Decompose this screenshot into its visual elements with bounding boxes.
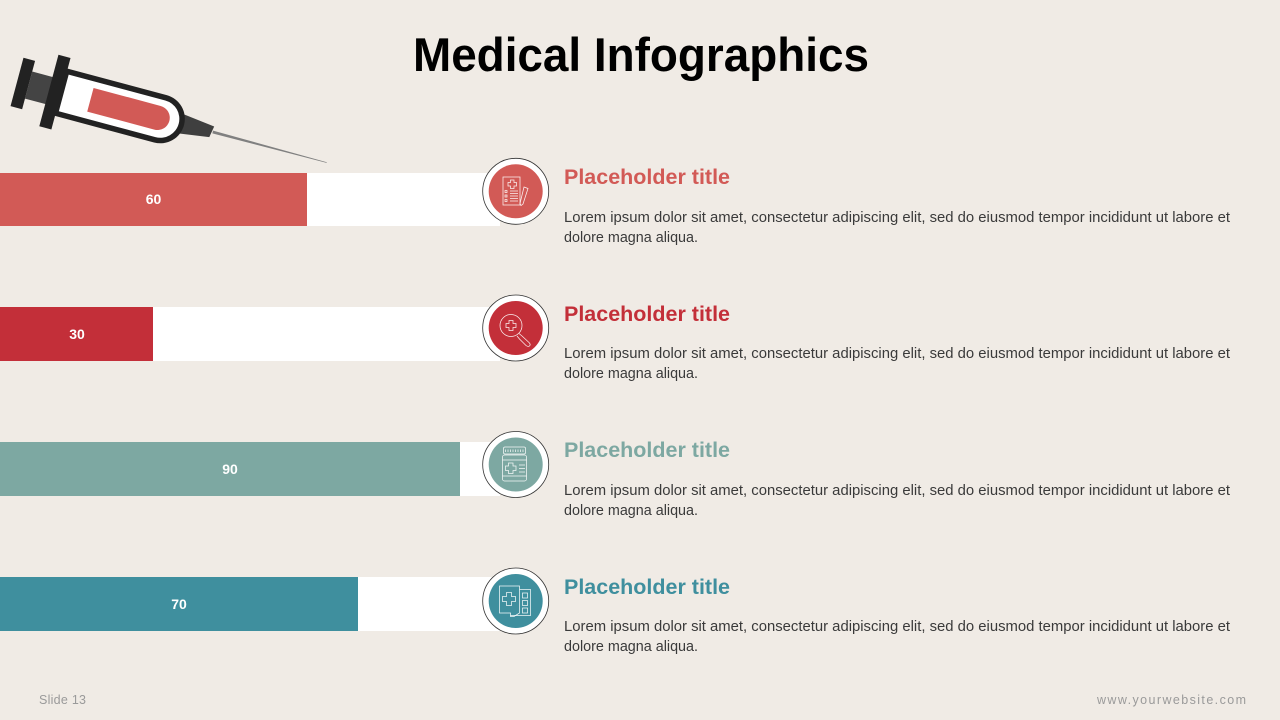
text block 2 [564, 303, 1231, 382]
bar row 4: track and value 70: 70 [171, 596, 187, 612]
text block 4: Placeholder title [564, 576, 730, 599]
text block 1 [564, 166, 1231, 246]
bar row 1: track and value 60: 60 [146, 191, 161, 207]
text block 1: Placeholder title [564, 166, 730, 189]
text block 1: dolore magna aliqua. [564, 229, 698, 246]
text block 2: Placeholder title [564, 303, 730, 326]
icon: magnifier badge [483, 295, 549, 361]
text block 2: dolore magna aliqua. [564, 365, 698, 382]
bar row 4: track and value 70 [0, 577, 500, 631]
bar row 3: track and value 90: 90 [222, 461, 238, 477]
text block 1: Lorem ipsum dolor sit amet, consectetur adipiscing elit, sed do eiusmod tempor incididunt ut labore et [564, 209, 1231, 226]
footer: website: www.yourwebsite.com [1096, 693, 1246, 707]
text block 2: Lorem ipsum dolor sit amet, consectetur adipiscing elit, sed do eiusmod tempor incididunt ut labore et [564, 345, 1231, 362]
icon: medicine jar badge [483, 432, 549, 498]
text block 3: Lorem ipsum dolor sit amet, consectetur adipiscing elit, sed do eiusmod tempor incididunt ut labore et [564, 482, 1231, 499]
icon: prescription and pills badge [483, 568, 549, 634]
text block 4: dolore magna aliqua. [564, 638, 698, 655]
text block 4: Lorem ipsum dolor sit amet, consectetur adipiscing elit, sed do eiusmod tempor incididunt ut labore et [564, 618, 1231, 635]
bar row 3: track and value 90 [0, 442, 500, 496]
text block 3: Placeholder title [564, 439, 730, 462]
title: Medical Infographics [413, 28, 869, 81]
footer: slide number: Slide 13 [39, 693, 86, 707]
icon: medical report badge [483, 158, 549, 224]
bar row 1: track and value 60 [0, 173, 500, 226]
text block 4 [564, 576, 1231, 655]
bar row 2: track and value 30 [0, 307, 500, 361]
bar row 2: track and value 30: 30 [69, 326, 85, 342]
icon: syringe [7, 46, 336, 201]
text block 3 [564, 439, 1231, 519]
text block 3: dolore magna aliqua. [564, 502, 698, 519]
